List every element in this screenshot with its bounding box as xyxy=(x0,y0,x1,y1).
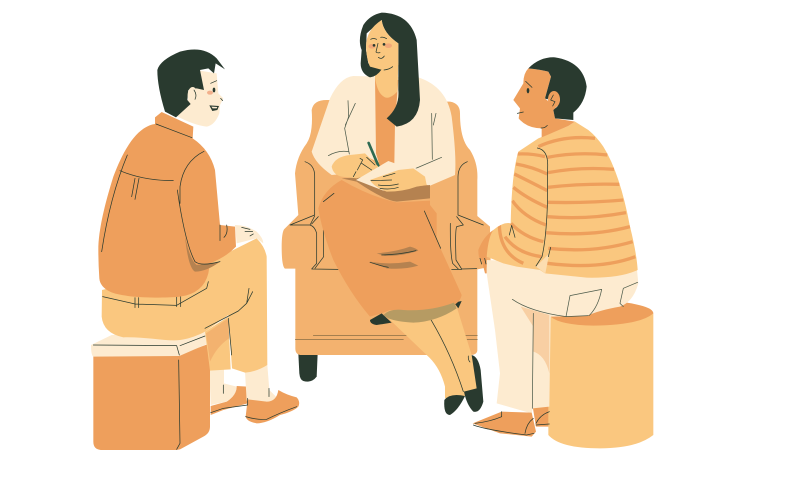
arm hand xyxy=(478,230,500,273)
shoe lines xyxy=(211,385,297,419)
skirt shadow hem xyxy=(383,303,457,323)
front leg and hips xyxy=(102,238,267,373)
armchair xyxy=(282,100,491,382)
stripes xyxy=(499,138,635,266)
sleeve cuff highlight xyxy=(536,253,549,273)
head xyxy=(513,57,587,137)
hand xyxy=(235,225,263,243)
right man group xyxy=(473,57,653,448)
trousers xyxy=(487,260,638,413)
back leg xyxy=(205,317,231,371)
striped shirt xyxy=(487,122,638,278)
head xyxy=(157,49,225,127)
left man group xyxy=(91,49,299,450)
notebook xyxy=(356,161,417,191)
leg line xyxy=(427,313,470,392)
back leg shade xyxy=(206,318,229,362)
stool box xyxy=(91,332,210,450)
right hand xyxy=(370,168,427,192)
writing hand xyxy=(332,153,378,178)
shoes xyxy=(370,301,483,415)
woman in armchair group xyxy=(282,13,491,415)
shoe lines xyxy=(473,412,549,435)
front shoe xyxy=(473,412,536,437)
skirt xyxy=(318,180,462,317)
face xyxy=(366,20,398,70)
hand fingers xyxy=(480,258,486,264)
round stool xyxy=(548,303,653,448)
woman's legs xyxy=(388,307,480,398)
front shoe xyxy=(246,390,299,423)
trouser lines xyxy=(512,282,638,408)
inner leg shade xyxy=(521,307,549,373)
jacket shadow xyxy=(185,237,220,272)
chair leg xyxy=(298,353,318,382)
socks xyxy=(209,368,237,405)
illustration: three people in conversation xyxy=(91,12,654,450)
hand lines xyxy=(353,157,398,189)
chair seams xyxy=(290,162,483,340)
cardigan xyxy=(312,76,455,186)
cardigan creases xyxy=(328,101,442,169)
pants xyxy=(102,238,267,373)
hair xyxy=(360,13,420,127)
finger lines xyxy=(242,227,253,236)
jacket xyxy=(98,112,236,298)
pen xyxy=(369,143,378,166)
skirt folds xyxy=(323,193,441,269)
back leg shoe xyxy=(211,386,248,415)
shirt fold lines xyxy=(509,148,551,266)
shadow under notebook xyxy=(342,177,430,202)
back shoe xyxy=(533,405,550,427)
jacket lines xyxy=(102,124,227,264)
dress top and neck xyxy=(375,63,398,167)
chair body xyxy=(282,100,491,355)
